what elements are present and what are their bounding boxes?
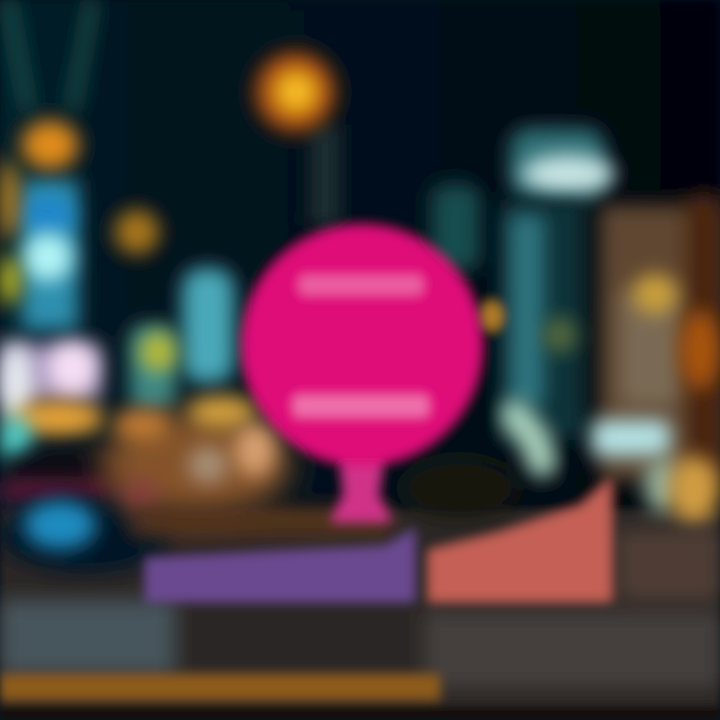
dark shrubs beneath the balloon (402, 458, 518, 518)
purple bar chart (145, 528, 415, 602)
street and ground (0, 510, 720, 720)
balloon stem (330, 455, 392, 522)
red bar chart (428, 476, 612, 602)
left tower lights (0, 0, 170, 573)
central left buildings (100, 268, 390, 536)
pink balloon callout (242, 225, 482, 522)
street lamp glow (255, 52, 338, 225)
right buildings (432, 128, 720, 600)
small orange light (115, 210, 159, 254)
balloon circle (242, 225, 482, 465)
balloon top text band (298, 274, 424, 296)
balloon bottom text band (292, 394, 430, 418)
